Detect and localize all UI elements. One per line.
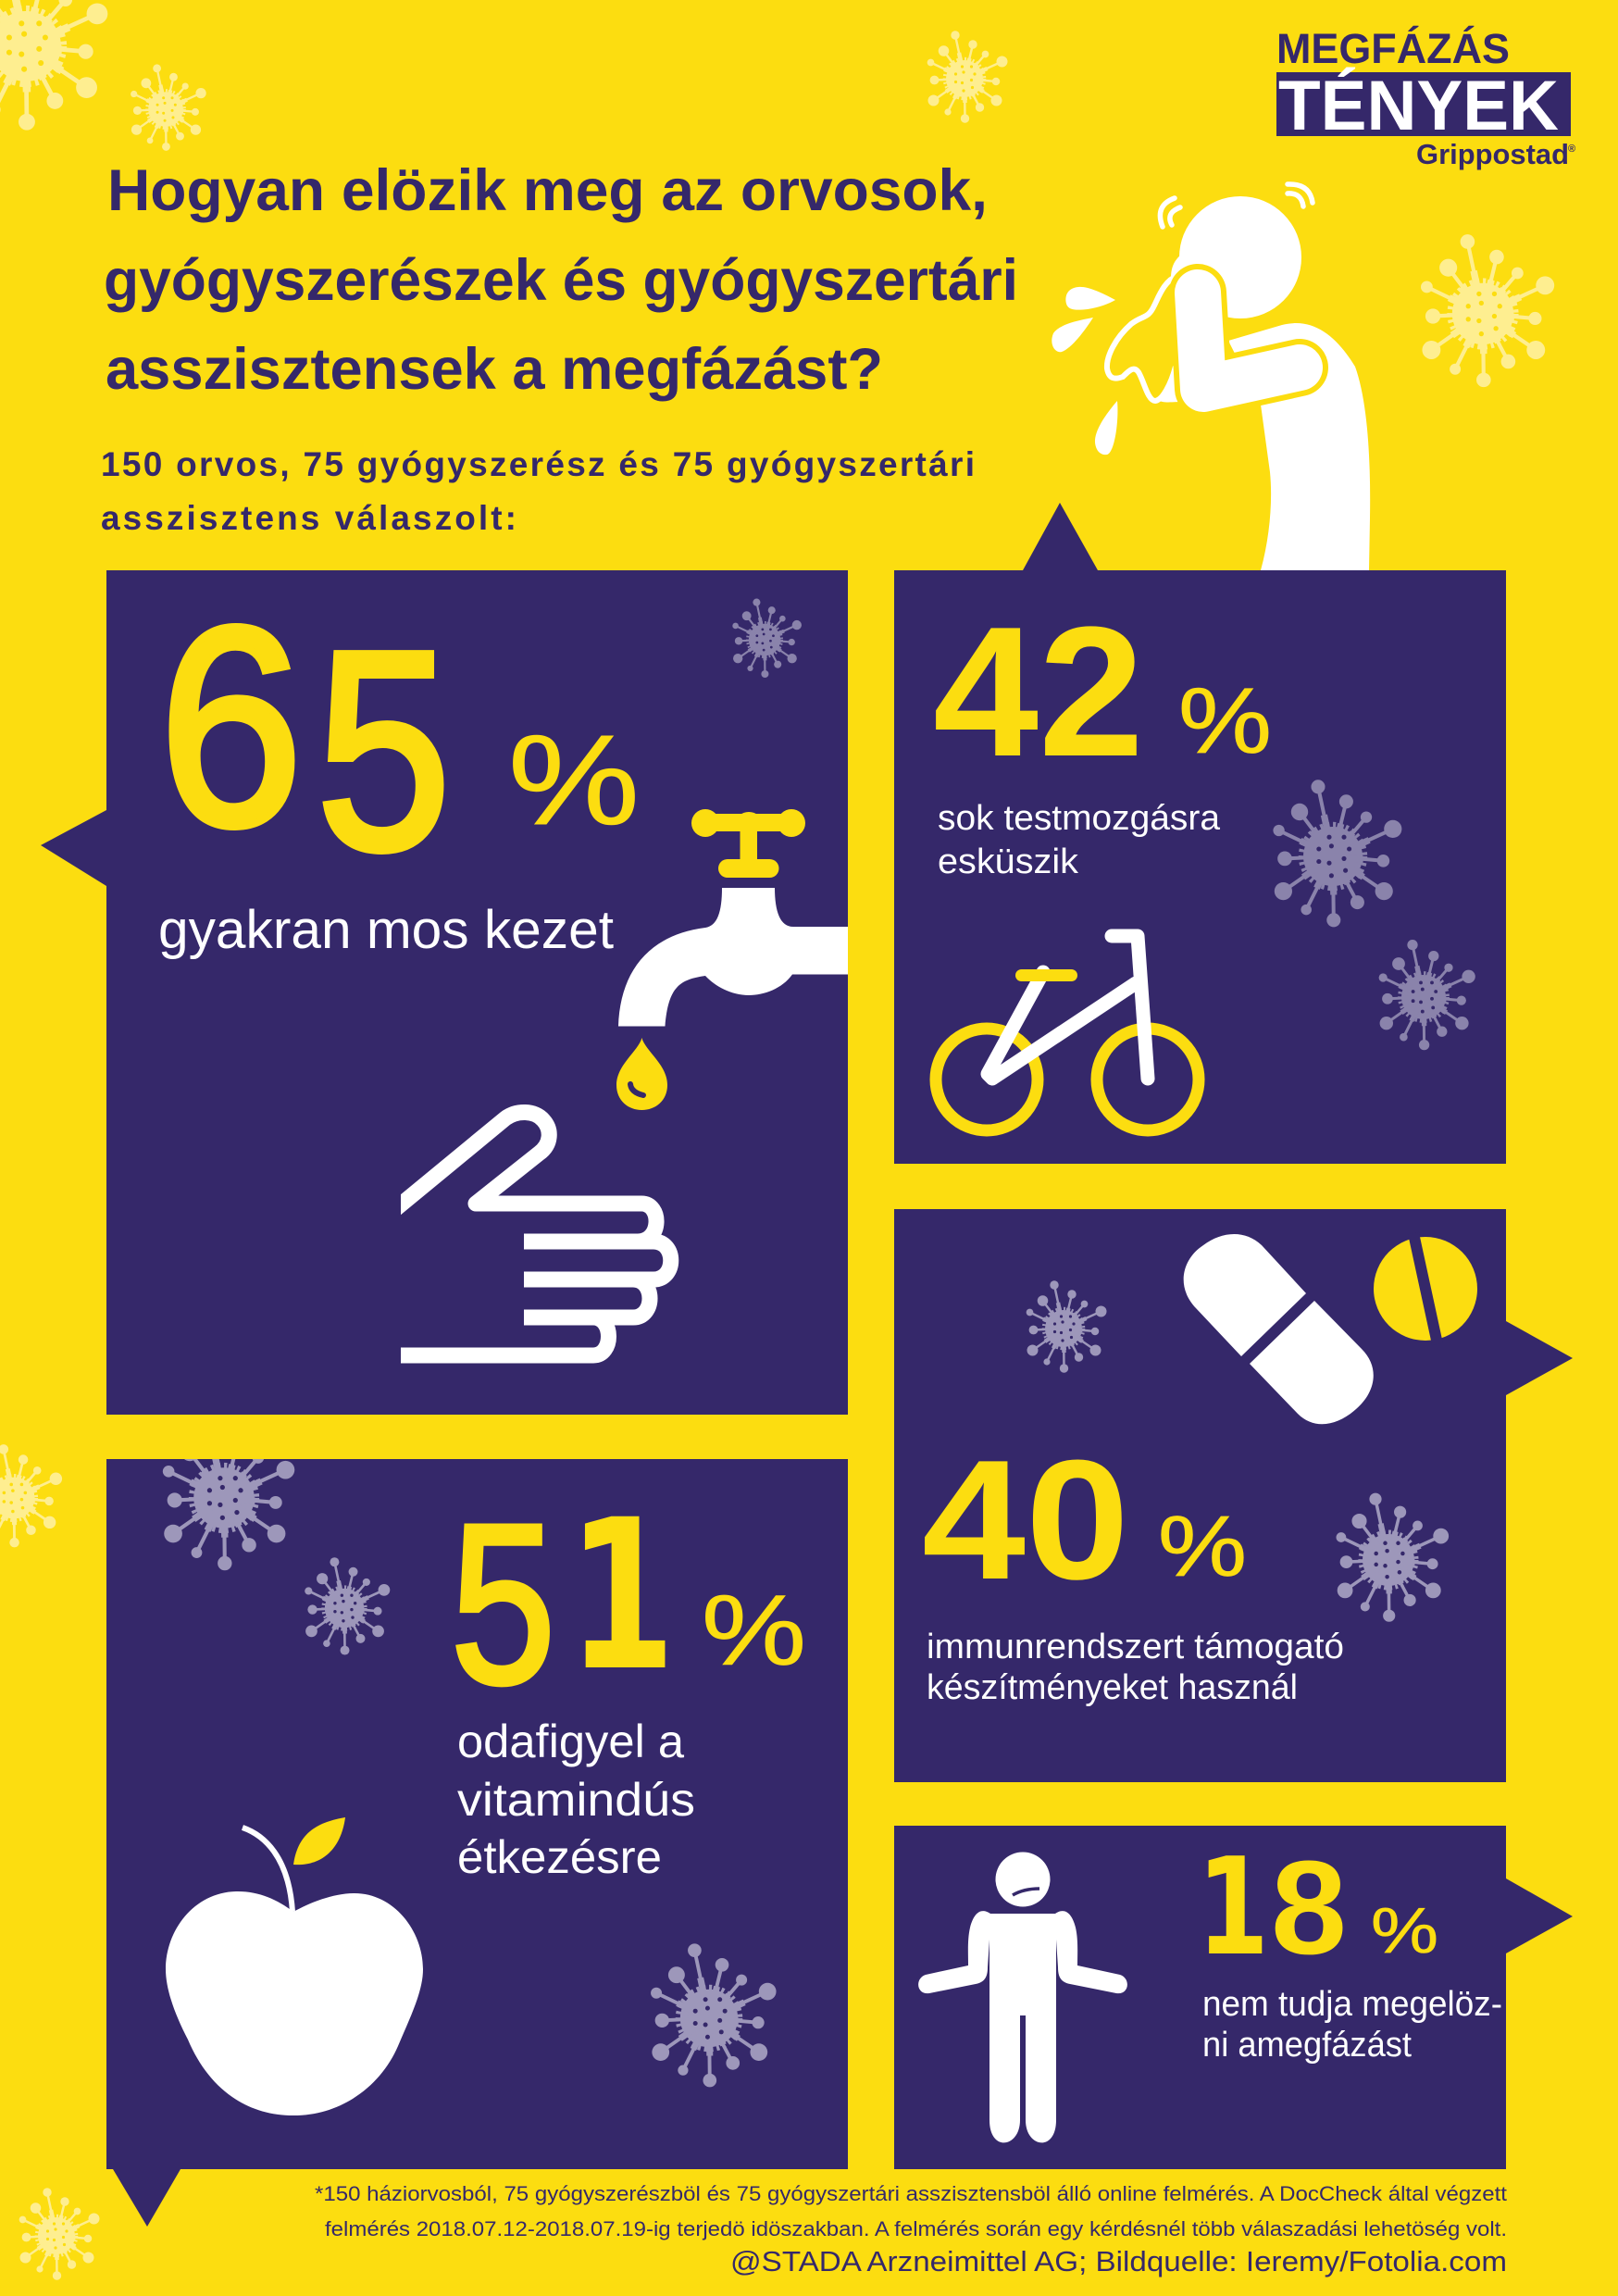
- subtitle: asszisztens válaszolt:: [101, 499, 517, 537]
- icon: apple: [166, 1817, 423, 2115]
- title: Hogyan elözik meg az orvosok,: [107, 158, 988, 223]
- number 42 percent: [933, 589, 1272, 795]
- number 18 percent: [1197, 1829, 1438, 1986]
- panel: 18% does not know: [894, 1826, 1573, 2169]
- label: immunrendszert támogató készítményeket használ: készítményeket használ: [927, 1668, 1298, 1707]
- icons: viruses in panel 42: [1273, 780, 1475, 1050]
- number 51 percent: %: [702, 1574, 806, 1686]
- icon: sneezing person: [1052, 184, 1370, 570]
- number 18 percent: 8: [1271, 1833, 1347, 1982]
- footnote and credit: @STADA Arzneimittel AG; Bildquelle: Ieremy/Fotolia.com: [730, 2245, 1507, 2277]
- icon: water drop: [616, 1038, 667, 1110]
- icons: viruses in panel 51: [163, 1419, 777, 2087]
- icon: hand: [384, 1112, 671, 1355]
- panel: 40% supplements: [894, 1209, 1573, 1782]
- icon: bicycle: [936, 936, 1199, 1130]
- number 40 percent: [922, 1424, 1247, 1615]
- label: nem tudja megelözni a megfázást: [1202, 1985, 1502, 2065]
- label: nem tudja megelözni a megfázást: ni amegfázást: [1202, 2026, 1412, 2065]
- footnote and credit: felmérés 2018.07.12-2018.07.19-ig terjedö idöszakban. A felmérés során egy kérdésnél több válaszadási lehetöség volt.: [325, 2217, 1507, 2240]
- number 65 percent: [159, 568, 640, 908]
- icon: virus in panel 65: [732, 599, 802, 678]
- number 51 percent: 1: [567, 1475, 676, 1716]
- number 42 percent: %: [1178, 669, 1272, 773]
- subtitle: [101, 445, 975, 537]
- number 42 percent: 42: [933, 589, 1144, 795]
- title: asszisztensek a megfázást?: [106, 337, 883, 402]
- label: sok testmozgásra esküszik: sok testmozgásra: [938, 799, 1221, 838]
- label: odafigyel a vitamindús étkezésre: odafigyel a: [457, 1716, 684, 1767]
- logo: Megfázás tények Grippostad: [1276, 25, 1575, 170]
- number 65 percent: %: [508, 709, 640, 852]
- label: odafigyel a vitamindús étkezésre: étkezésre: [457, 1831, 662, 1883]
- logo: Megfázás tények Grippostad: MEGFÁZÁS: [1276, 25, 1510, 72]
- label: gyakran mos kezet: gyakran mos kezet: [158, 900, 614, 960]
- panel: 51% vitamins: [106, 1419, 848, 2227]
- icon: shrugging person: [918, 1852, 1127, 2142]
- label: odafigyel a vitamindús étkezésre: vitamindús: [457, 1774, 695, 1826]
- logo: Megfázás tények Grippostad: TÉNYEK: [1278, 67, 1559, 145]
- icon: tap body: [618, 888, 848, 1026]
- label: sok testmozgásra esküszik: esküszik: [938, 842, 1079, 881]
- panel: 65% hand washing: [41, 568, 848, 1415]
- number 51 percent: 5: [451, 1477, 555, 1730]
- label: sok testmozgásra esküszik: [938, 799, 1221, 881]
- logo: Megfázás tények Grippostad: ®: [1568, 144, 1575, 155]
- panel: 42% exercise: [894, 503, 1506, 1164]
- icons: viruses in panel 40: [1027, 1280, 1449, 1622]
- number 51 percent: [451, 1475, 806, 1730]
- footnote and credit: [315, 2182, 1507, 2277]
- icon: capsule: [1184, 1234, 1374, 1424]
- number 40 percent: %: [1158, 1498, 1247, 1594]
- logo: Megfázás tények Grippostad: Grippostad: [1416, 138, 1569, 170]
- number 18 percent: %: [1371, 1894, 1438, 1966]
- label: nem tudja megelözni a megfázást: nem tudja megelöz-: [1202, 1985, 1502, 2024]
- footnote and credit: *150 háziorvosból, 75 gyógyszerészböl és 75 gyógyszertári asszisztensböl álló online felmérés. A DocCheck által végzett: [315, 2182, 1507, 2205]
- icon: tap handle: [691, 809, 805, 878]
- title: gyógyszerészek és gyógyszertári: [104, 248, 1018, 313]
- number 18 percent: 1: [1197, 1829, 1269, 1986]
- subtitle: 150 orvos, 75 gyógyszerész és 75 gyógyszertári: [101, 445, 975, 483]
- icon: tablet: [1374, 1233, 1477, 1344]
- label: odafigyel a vitamindús étkezésre: [457, 1716, 695, 1883]
- number 65 percent: 5: [317, 593, 451, 908]
- number 40 percent: 40: [922, 1424, 1129, 1615]
- label: immunrendszert támogató készítményeket használ: immunrendszert támogató: [927, 1628, 1344, 1666]
- label: immunrendszert támogató készítményeket használ: [927, 1628, 1344, 1707]
- title: [104, 158, 1018, 402]
- number 65 percent: 6: [159, 568, 303, 884]
